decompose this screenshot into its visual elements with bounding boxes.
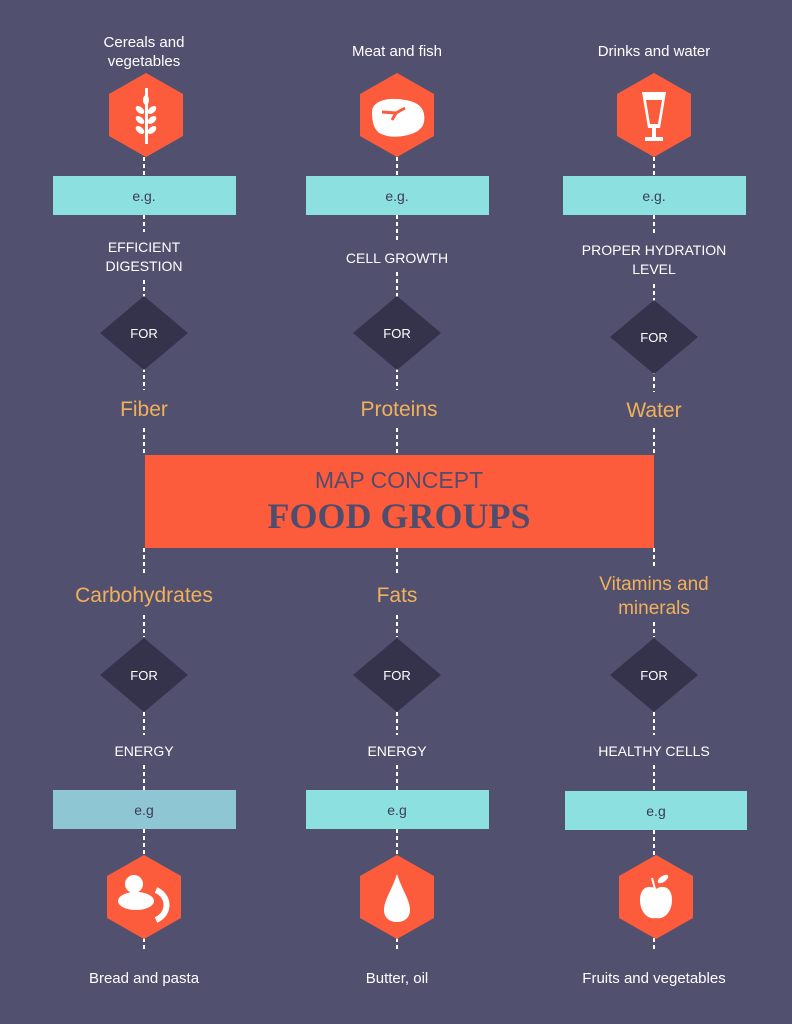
column: meat: CELL GROWTH (346, 250, 448, 266)
column: vitamins: FOR (640, 668, 668, 683)
icon: glass hexagon (617, 73, 691, 157)
column: carbohydrates: Carbohydrates (75, 584, 213, 607)
column: fats (306, 584, 489, 987)
column: fats: e.g (387, 802, 407, 818)
column: drinks (563, 43, 746, 422)
icon: bread hexagon (107, 855, 181, 939)
benefit: DIGESTION (105, 258, 183, 274)
icon: steak hexagon (360, 73, 434, 157)
label: cereals: Cereals and (104, 34, 184, 51)
benefit: EFFICIENT (108, 239, 180, 255)
icon: drop hexagon (360, 855, 434, 939)
title box: FOOD GROUPS (267, 496, 531, 536)
column: drinks: e.g. (642, 188, 666, 204)
column: drinks: FOR (640, 330, 668, 345)
column: fats: ENERGY (367, 743, 427, 759)
column: drinks: PROPER HYDRATION (582, 242, 726, 258)
column: vitamins: Fruits and vegetables (582, 970, 726, 987)
column: drinks: LEVEL (632, 261, 676, 277)
title box: MAP CONCEPT (315, 467, 483, 493)
column: vitamins: minerals (618, 598, 690, 619)
column: carbohydrates: ENERGY (114, 743, 174, 759)
icon: apple hexagon (619, 855, 693, 939)
column: meat: Meat and fish (352, 43, 442, 60)
icon: wheat hexagon (109, 73, 183, 157)
column: meat (306, 43, 489, 421)
column: carbohydrates: Bread and pasta (89, 970, 200, 987)
title box (145, 455, 654, 548)
column: cereals (53, 34, 236, 421)
column: vitamins (565, 574, 747, 987)
diamond: for (100, 296, 188, 370)
example box: e.g. (132, 188, 156, 204)
column: fats: Butter, oil (366, 970, 428, 987)
column: carbohydrates: FOR (130, 668, 158, 683)
label: cereals: vegetables (108, 53, 180, 70)
column: carbohydrates: e.g (134, 802, 154, 818)
column: meat: e.g. (385, 188, 409, 204)
column: drinks: Water (626, 399, 682, 422)
column: carbohydrates (53, 584, 236, 987)
column: drinks: Drinks and water (598, 43, 710, 60)
diamond: for: FOR (130, 326, 158, 341)
column: vitamins: HEALTHY CELLS (598, 743, 710, 759)
column: meat: FOR (383, 326, 411, 341)
column: meat: Proteins (360, 398, 438, 421)
nutrient: fiber: Fiber (120, 398, 168, 421)
column: fats: FOR (383, 668, 411, 683)
column: vitamins: e.g (646, 803, 666, 819)
column: fats: Fats (377, 584, 417, 607)
example box (53, 176, 236, 215)
column: vitamins: Vitamins and (599, 574, 709, 595)
